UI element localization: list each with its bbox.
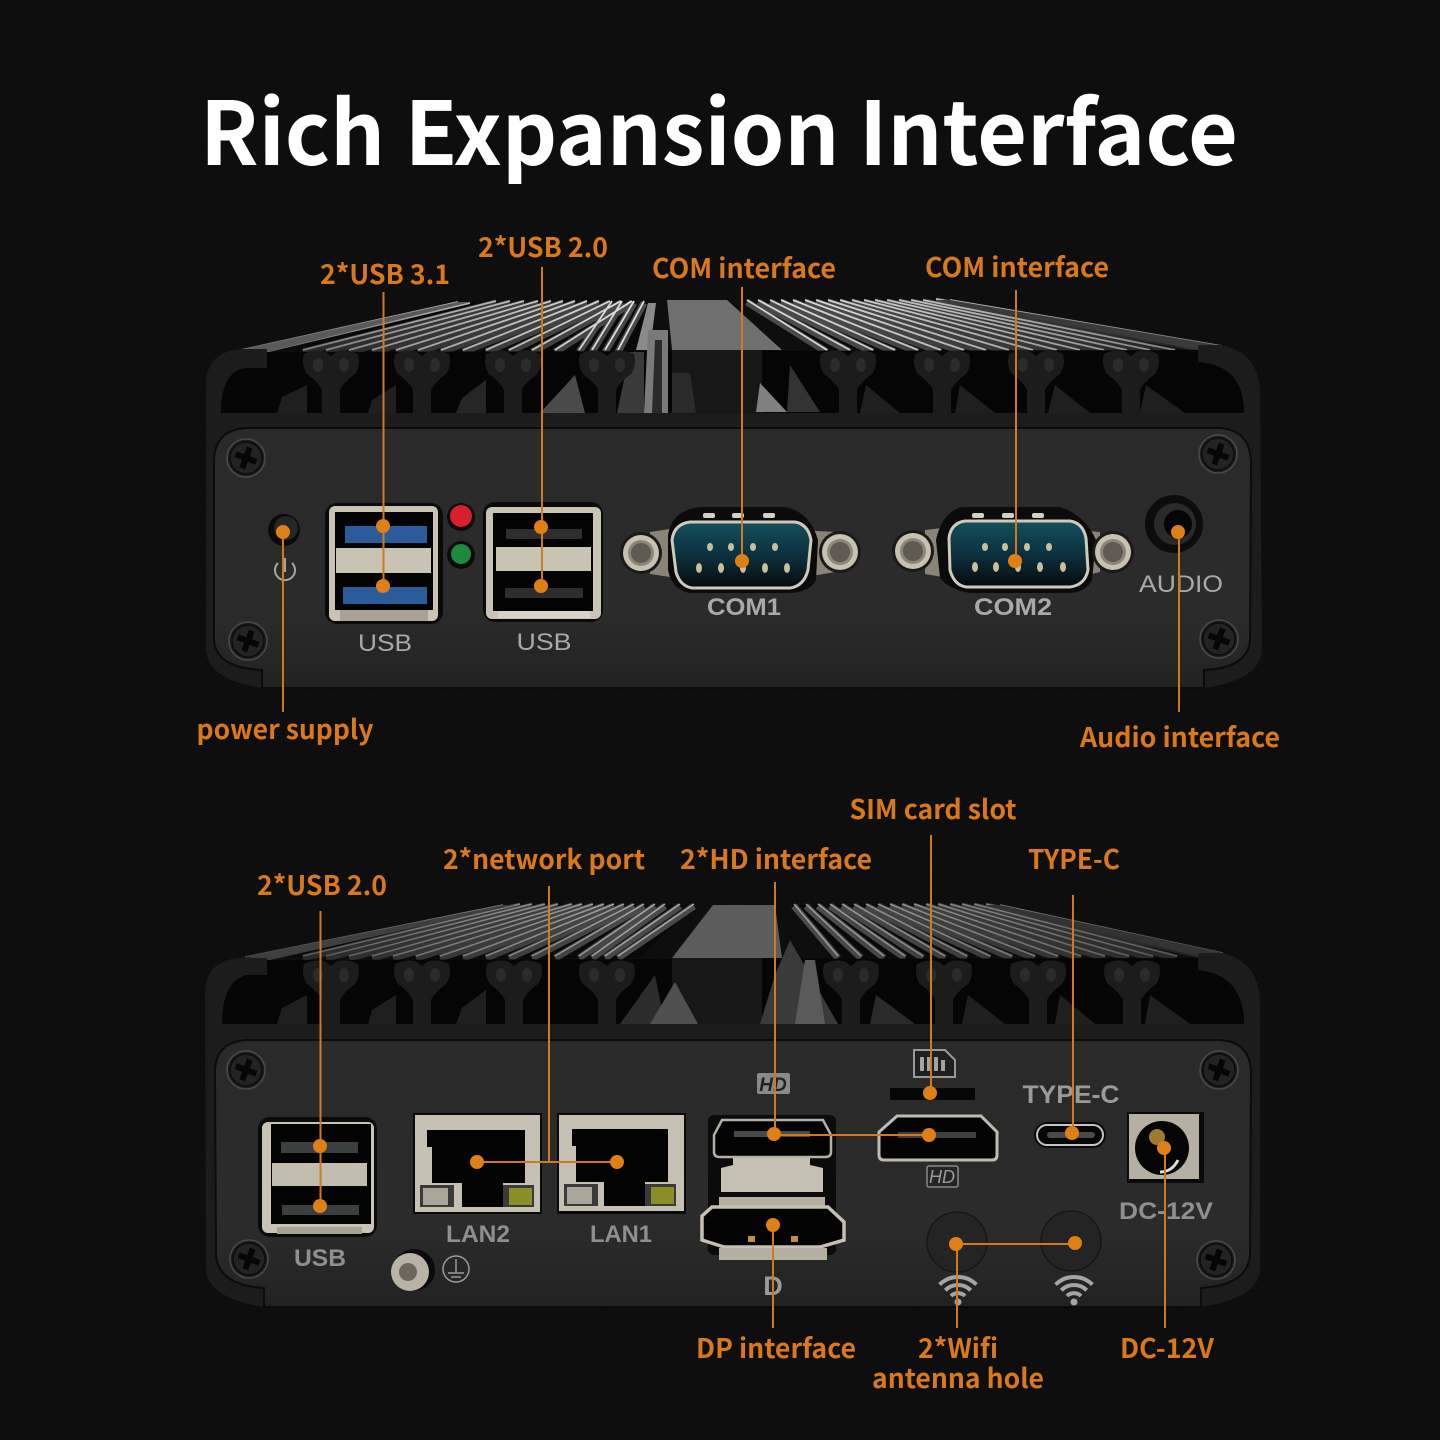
port label: AUDIO: AUDIO (1139, 571, 1223, 598)
ground screw and symbol (391, 1249, 469, 1291)
callout: 2*network port: 2*network port (443, 838, 645, 877)
callout: DC-12V: DC-12V (1120, 1327, 1214, 1366)
face plate (214, 428, 1251, 688)
heatsink comb (222, 940, 1244, 1024)
antenna hole right (1041, 1211, 1101, 1271)
callout: DC-12V (1120, 1141, 1214, 1366)
device: rear view mini PC (205, 904, 1260, 1307)
LAN1 port (557, 1113, 686, 1214)
port label: USB: USB (294, 1245, 346, 1272)
HDMI and DP port stack (702, 1115, 844, 1260)
callout: DP interface (696, 1218, 856, 1366)
callout: SIM card slot: SIM card slot (850, 788, 1016, 827)
callout: 2*HD interface (680, 838, 936, 1142)
callout: 2*USB 3.1: 2*USB 3.1 (320, 253, 450, 292)
callout: COM interface 1: COM interface (652, 247, 836, 286)
callout: 2*USB 2.0 top: 2*USB 2.0 (478, 226, 608, 265)
callout: 2*USB 2.0 bottom: 2*USB 2.0 (257, 864, 387, 903)
heatsink fins top (245, 904, 1223, 960)
HD icon lower: HD (929, 1167, 955, 1187)
callout: 2*Wifi antenna hole (872, 1236, 1082, 1396)
port label: COM1: COM1 (707, 594, 781, 621)
COM1 connector (620, 507, 861, 593)
port label: COM2: COM2 (974, 594, 1052, 621)
HDMI port right (879, 1116, 997, 1160)
callout: power supply (196, 525, 374, 747)
callout: TYPE-C: TYPE-C (1028, 838, 1120, 877)
callout: Audio interface: Audio interface (1079, 716, 1280, 755)
antenna hole left (927, 1212, 987, 1272)
port label: LAN1: LAN1 (590, 1221, 652, 1248)
callout: 2*Wifi antenna hole: 2*Wifi (918, 1327, 998, 1366)
callout: power supply: power supply (196, 708, 374, 747)
screws (227, 435, 1238, 660)
callout: 2*Wifi antenna hole: antenna hole (872, 1357, 1044, 1396)
callout: Audio interface (1079, 525, 1280, 755)
port label: USB: USB (516, 629, 572, 656)
callout: 2*USB 3.1 (320, 253, 450, 593)
heatsink fins top (241, 299, 1222, 352)
port label: TYPE-C: TYPE-C (1022, 1081, 1120, 1109)
device: front view mini PC (206, 299, 1262, 688)
HD icon upper: HD (759, 1075, 787, 1096)
callout: COM interface 2: COM interface (925, 246, 1109, 285)
title: Rich Expansion Interface (200, 64, 1238, 191)
DC power jack (1127, 1112, 1204, 1183)
heatsink posts (303, 960, 1160, 1024)
wifi icon right (1056, 1277, 1092, 1306)
COM2 connector (892, 507, 1134, 593)
USB 3.1 port stack (325, 503, 443, 624)
callout: COM interface 1 (652, 247, 836, 568)
USB 2.0 port stack (483, 502, 603, 622)
center block (672, 905, 782, 958)
port label: LAN2: LAN2 (446, 1221, 510, 1248)
port label: USB: USB (358, 630, 412, 657)
chassis body (205, 953, 1260, 1307)
callout: 2*HD interface: 2*HD interface (680, 838, 872, 877)
callout: DP interface: DP interface (696, 1327, 856, 1366)
SIM icon (914, 1050, 955, 1077)
callout: 2*USB 2.0 top (478, 226, 608, 593)
audio jack (1145, 495, 1203, 553)
face plate (215, 1040, 1251, 1307)
wifi icon left (940, 1277, 976, 1306)
center block (667, 300, 782, 350)
status LEDs (447, 503, 475, 569)
heatsink comb (221, 330, 1244, 414)
LAN2 port (413, 1113, 542, 1214)
DP icon: D (763, 1271, 783, 1301)
callout: COM interface 2 (925, 246, 1109, 568)
callout: 2*network port (443, 838, 645, 1169)
SIM slot (890, 1088, 975, 1100)
callout: 2*USB 2.0 bottom (257, 864, 387, 1213)
heatsink posts (303, 350, 1159, 414)
chassis body (206, 345, 1262, 688)
callout: SIM card slot (850, 788, 1016, 1100)
screws (227, 1051, 1238, 1279)
power button (268, 514, 300, 580)
port label: DC-12V: DC-12V (1119, 1198, 1213, 1225)
Type-C port (1034, 1122, 1106, 1148)
USB 2.0 port stack (258, 1117, 377, 1237)
callout: TYPE-C (1028, 838, 1120, 1140)
